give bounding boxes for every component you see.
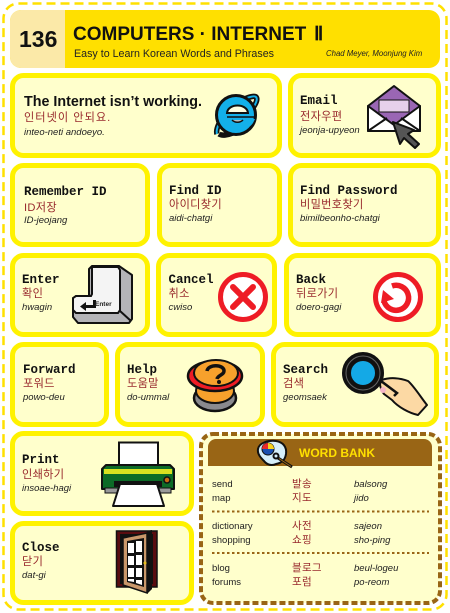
card: Forward (12, 344, 106, 424)
word list: 사전 (292, 520, 312, 532)
word list: beul-logeu (354, 563, 399, 574)
word list: forums (212, 577, 241, 588)
card: Enter: Enter (22, 273, 60, 287)
word list: 포럼 (292, 575, 312, 588)
card: Cancel: 취소 (168, 287, 190, 300)
header banner (10, 10, 440, 68)
card: Close: 닫기 (22, 555, 43, 568)
icon: palette (258, 441, 292, 467)
card: Forward: powo-deu (22, 392, 65, 403)
card: Search (274, 344, 436, 424)
card: Find ID: Find ID (169, 184, 222, 198)
card: The Internet isn't working (12, 76, 280, 156)
word bank title: WORD BANK (299, 446, 375, 460)
word list: jido (352, 493, 369, 504)
card: Find ID: 아이디찾기 (169, 198, 222, 211)
word list: blog (212, 563, 230, 574)
word list: 쇼핑 (292, 534, 312, 546)
card: Find Password: Find Password (300, 184, 398, 198)
title numeral: Ⅱ (314, 24, 323, 45)
card: Find Password: 비밀번호찾기 (300, 198, 364, 211)
icon: internet explorer (216, 96, 257, 135)
card: The Internet isn't working: 인터넷이 안되요. (24, 111, 111, 124)
card: Help: 도움말 (127, 376, 159, 390)
panel: word bank (201, 434, 440, 603)
card: Back: 뒤로가기 (296, 287, 338, 300)
card: Cancel (158, 256, 274, 334)
card: Find Password: bimilbeonho-chatgi (300, 213, 381, 224)
card: Search: geomsaek (283, 392, 328, 403)
card: The Internet isn't working: inteo-neti andoeyo. (24, 127, 105, 138)
card: Print: Print (22, 453, 60, 467)
icon: help button (188, 360, 242, 411)
card: Search: Search (283, 363, 328, 377)
card: Help: Help (127, 363, 157, 377)
card: Find ID: aidi-chatgi (169, 213, 213, 224)
card: Cancel: cwiso (168, 302, 192, 313)
card: Email: Email (300, 94, 338, 108)
card: Close: dat-gi (22, 570, 47, 581)
card: The Internet isn't working: The Internet isn’t working. (24, 94, 202, 110)
word list: 블로그 (292, 562, 322, 574)
card: Find Password (290, 166, 438, 244)
word list: dictionary (212, 521, 253, 532)
authors: Chad Meyer, Moonjung Kim (326, 49, 423, 58)
icon: envelope with cursor (368, 86, 420, 148)
icon: magnifier and hand (346, 356, 427, 415)
card: Remember ID: ID저장 (24, 201, 57, 214)
card: Back: doero-gagi (296, 302, 342, 313)
icon: back arrow (376, 274, 420, 320)
icon: door (116, 530, 157, 594)
card: Forward: Forward (23, 363, 76, 377)
card: Enter: 확인 (22, 287, 43, 300)
card: Print (12, 434, 192, 514)
icon: enter key: Enter (95, 301, 112, 308)
card: Remember ID: ID-jeojang (24, 215, 68, 226)
word list: map (212, 493, 230, 504)
card: Back (286, 256, 438, 334)
card: Cancel: Cancel (168, 273, 214, 287)
word list (212, 478, 399, 588)
card: Enter: hwagin (22, 302, 52, 313)
word bank header (208, 439, 432, 466)
word list: 지도 (292, 492, 312, 504)
card: Find ID (160, 166, 280, 244)
lesson number: 136 (19, 26, 57, 52)
card: Enter (12, 256, 148, 334)
icon: printer (102, 442, 174, 506)
card: Close (12, 524, 192, 602)
word list: 발송 (292, 478, 312, 490)
card: Forward: 포워드 (23, 377, 55, 390)
card: Back: Back (296, 273, 327, 287)
card: Remember ID: Remember ID (24, 185, 107, 199)
card: Help: do-ummal (127, 392, 170, 403)
card: Print: insoae-hagi (22, 483, 72, 494)
word list: sho-ping (354, 535, 391, 546)
word list: shopping (212, 535, 251, 546)
card: Email: jeonja-upyeon (298, 125, 360, 136)
card: Remember ID (12, 166, 148, 244)
card: Email (290, 76, 438, 156)
card: Close: Close (22, 541, 60, 555)
title: COMPUTERS · INTERNET (73, 24, 307, 45)
card: Print: 인쇄하기 (22, 467, 64, 481)
card: Email: 전자우편 (300, 110, 342, 123)
word list: send (212, 479, 233, 490)
subtitle: Easy to Learn Korean Words and Phrases (74, 48, 274, 60)
card: Help (118, 344, 262, 424)
icon: cancel cross (220, 274, 266, 320)
card: Search: 검색 (283, 377, 304, 390)
word list: balsong (354, 479, 388, 490)
word list: po-reom (353, 577, 389, 588)
word list: sajeon (354, 521, 382, 532)
